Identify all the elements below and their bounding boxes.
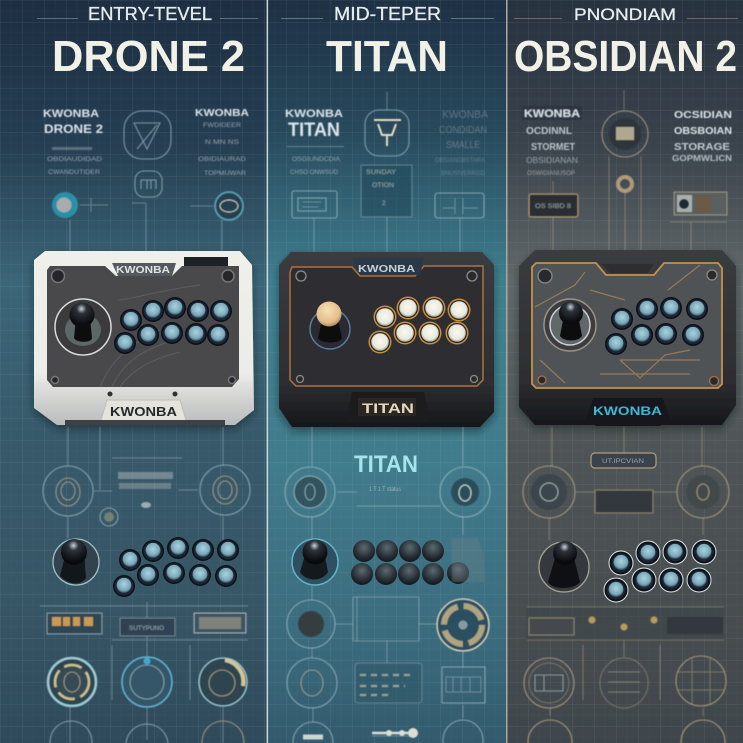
text: Obsidian right specs: STORAGE [674,142,730,153]
text: Titan right specs [435,109,489,177]
badge: Kwonba neon: KWONBA [593,406,662,418]
controller body [34,251,254,425]
spec block: Drone 2 top [43,107,249,252]
brand plate [352,258,424,275]
joystick [544,299,596,351]
joystick [539,541,589,592]
text: Drone 2 right specs: KWONBA [195,107,249,119]
icon: Titan emblem [365,92,409,156]
text: Obsidian left specs: STORMET [531,142,575,153]
badge: Kwonba: KWONBA [110,405,177,419]
text: Obsidian left specs: OBSIDIANAN [526,156,578,165]
lower schematic: Titan [285,427,490,743]
tier label: mid-tier: MID-TEPER [334,4,441,24]
text: Titan right specs: OBSIANGBSTARA [435,157,486,164]
controller: Obsidian 2 [519,250,736,426]
schematic lines and fingerprint icons [523,427,729,743]
heading: Titan: 1 T 1 T status [369,486,402,493]
text: Titan right specs: KWONBA [442,109,489,121]
controller: Drone 2: KWONBA [116,265,170,276]
action buttons [113,537,239,597]
text: Titan left specs: OSGIUNDCDIA [292,156,341,163]
text: Obsidian right specs: OCSIDIAN [674,110,732,121]
text: Titan right specs: CONDIDAN [439,125,487,136]
circuit lines [535,265,700,383]
column header: Titan [281,4,494,81]
icon: Titan screen left [292,191,337,218]
heading: Titan [354,451,418,493]
controller body [279,252,494,427]
text: Drone 2 left specs: DRONE 2 [44,122,103,136]
text: Obsidian left specs: OCDINNL [526,126,572,137]
title: Titan: TITAN [326,32,448,81]
icon: Titan side module [452,538,484,582]
text: Obsidian left specs: KWONBA [524,108,580,120]
icon: Drone 2 oval [190,192,243,220]
feature boxes [47,613,246,636]
faceplate [532,263,722,388]
text: Titan left specs [285,108,344,176]
text: Titan left specs: KWONBA [285,108,343,120]
icon: Drone 2 teal dial [52,192,108,218]
tier label: premium: PNONDIAM [574,5,676,24]
column header: Obsidian 2 [514,5,738,81]
faceplate [47,266,239,387]
tier label: entry-level: ENTRY-TEVEL [88,4,212,24]
panel: Titan column background [268,0,506,743]
text: Drone 2 right specs: TOPMUWAR [204,170,246,177]
brand plate [112,263,176,276]
lower schematic: Obsidian 2 [523,427,729,743]
badge: Titan: TITAN [362,400,414,416]
screws [538,269,718,386]
panel: Drone 2 column background [0,0,267,743]
text: Drone 2 left specs: CWANDUTIDER [48,169,100,176]
badge: Kwonba neon [586,398,670,426]
heading: Titan: TITAN [354,451,418,478]
icon: Titan info card: SUNDAY [366,169,397,176]
icon: Titan screen right [435,193,484,218]
icon: Obsidian module box [670,192,727,222]
text: Drone 2 right specs [195,107,249,177]
label pill: UT.IPCVIAN [602,458,644,465]
spec block: Titan top [285,92,489,252]
controller: Drone 2 [34,251,254,425]
icon: Drone 2 shield [124,111,171,159]
text: Titan right specs: SMALLE [446,140,480,151]
badge: Titan [346,392,430,422]
controller body [519,250,736,425]
schematic lines and fingerprint icons [40,427,250,743]
text: Obsidian right specs [672,110,732,163]
joystick [292,539,338,585]
controller: Titan: KWONBA [358,264,415,275]
text: Drone 2 right specs: OBIDIAURAD [198,156,246,163]
controller: Titan [279,252,494,427]
joystick [55,299,111,355]
screws [52,270,236,384]
text: Titan left specs: TITAN [288,120,340,141]
text: Obsidian left specs [522,106,582,177]
icon: Obsidian emblem [602,90,648,157]
icon: Obsidian ring [618,177,632,191]
action buttons [604,540,716,602]
joystick [53,539,99,585]
icon: Drone 2 chip [135,171,162,197]
joystick [310,302,350,349]
spec block: Obsidian top [522,90,732,252]
text: Drone 2 right specs: N MN NS [205,139,240,146]
screws [296,271,478,382]
text: Obsidian left specs: OSWIDIANUSOP [527,170,575,177]
text: Drone 2 left specs: KWONBA [43,108,99,120]
faceplate [290,266,483,386]
text: Titan left specs: CHSO ONWSUD [290,169,338,176]
icon: Titan gold dial [437,599,489,651]
feature boxes: SUTYPUNO [129,625,164,632]
icon: Obsidian label box [529,194,578,217]
badge: Kwonba [65,392,225,425]
text: Drone 2 left specs: OBDIAUDIDAD [47,156,102,163]
action buttons [114,297,232,354]
bottom dial icons [48,657,247,743]
icon: Titan info card [361,165,412,217]
column header: Drone 2 [37,4,258,81]
schematic lines and fingerprint icons [285,427,490,743]
text: Obsidian right specs: OBSBOIAN [674,126,732,137]
title: Drone 2: DRONE 2 [52,32,245,81]
icon: Obsidian label box: OS SIBD 8 [535,203,571,210]
label pill [591,453,656,468]
action buttons [368,296,470,354]
lower schematic: Drone 2 [40,427,250,743]
text: Titan right specs: BNUSIVERRGD [441,170,485,177]
action buttons [351,540,469,585]
text: Obsidian right specs: GOPMWLICN [672,153,732,163]
icon: Titan info card: OTION [372,182,394,189]
text: Drone 2 left specs [43,108,103,176]
panel: Obsidian 2 column background [507,0,743,743]
text: Drone 2 right specs: FWDIDEER [203,122,241,129]
icon: Titan info card: 2 [382,200,386,207]
action buttons [605,297,708,355]
